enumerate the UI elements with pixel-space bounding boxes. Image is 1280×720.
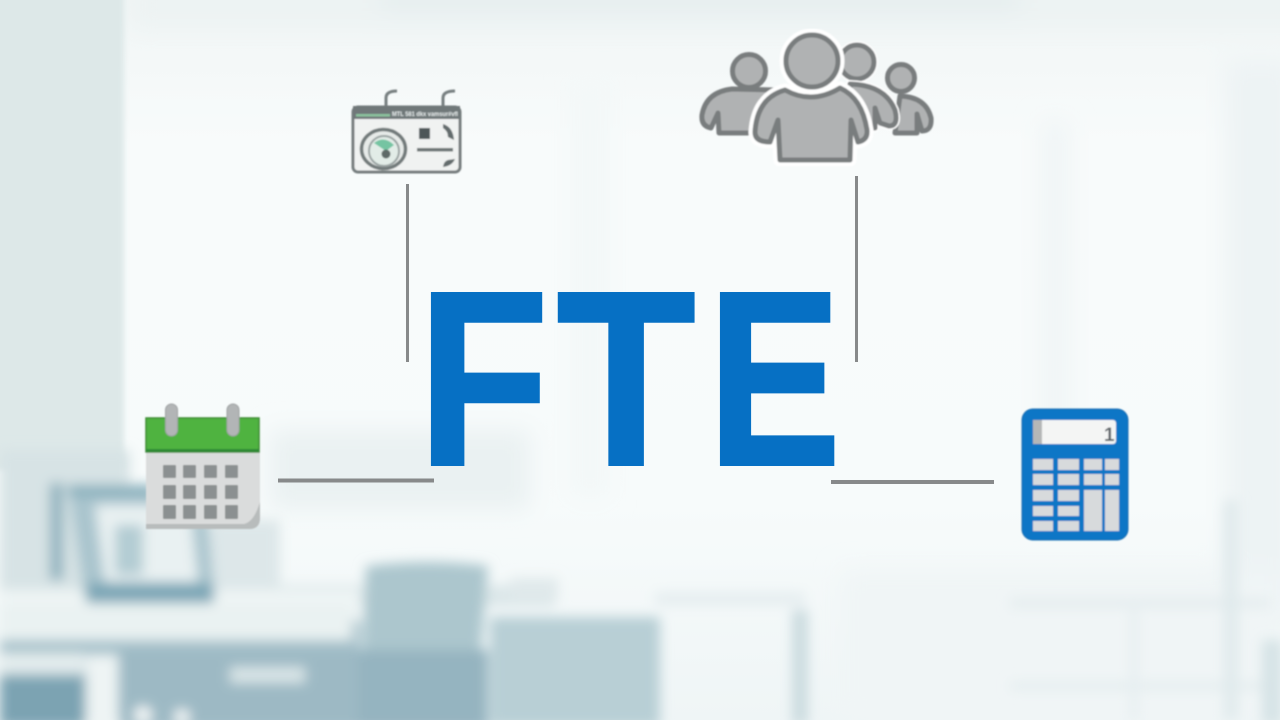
connector line: calendar to FTE [278,478,434,482]
calculator display: 1 [1104,425,1115,446]
device label text: MTL 581 dkx vamsur#vfl [392,111,458,118]
title: FTE: F [418,241,549,518]
calendar day grid [163,465,238,519]
icon: calendar [146,404,260,529]
calendar rings [166,404,239,436]
connector line: people to FTE [855,176,858,362]
background: left wall [0,0,124,470]
connector line: calculator to FTE [831,480,994,484]
icon: calculator [1022,409,1128,540]
person back right [888,64,931,133]
title: FTE: T [557,240,696,518]
icon: radio dashboard device [353,91,460,172]
person left [702,54,775,133]
title: FTE: E [708,240,841,517]
device dial [362,130,406,168]
calculator keys [1033,459,1119,531]
person middle right [840,45,896,128]
icon: group of people [702,35,931,160]
title: FTE [418,240,841,518]
person front [755,35,867,160]
connector line: device to FTE [406,184,409,362]
